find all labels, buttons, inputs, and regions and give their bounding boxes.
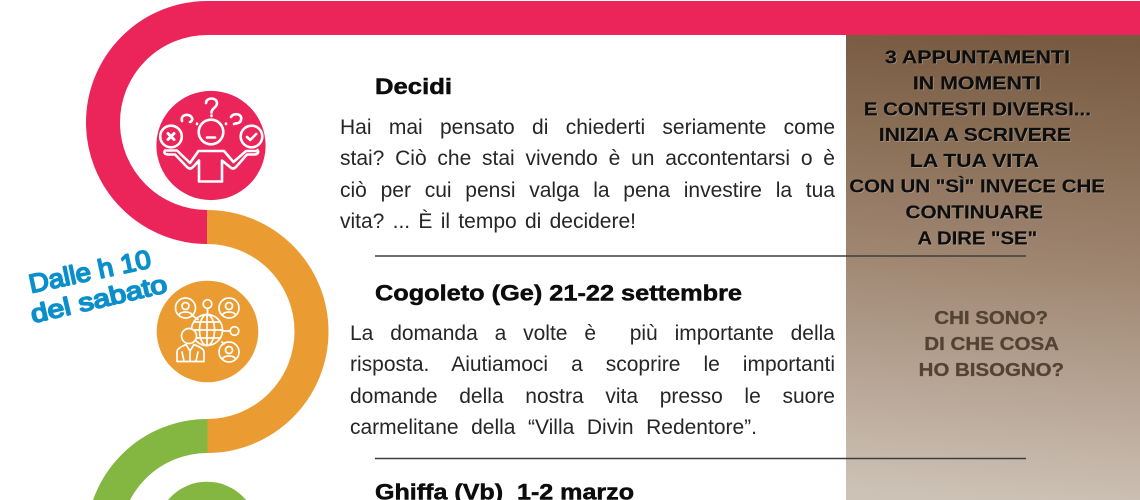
icon: global network on orange circle: [157, 281, 258, 382]
panel questions text: HO BISOGNO?: [919, 360, 1064, 380]
icon: green circle (cropped): [156, 482, 258, 500]
section headings: [375, 74, 742, 500]
text block: Decidi: vita? ... È il tempo di decidere!: [340, 210, 636, 233]
text block: Decidi: [340, 116, 835, 233]
divider lines: [375, 256, 1026, 458]
text block: Cogoleto: carmelitane della “Villa Divin Redentore”.: [350, 416, 757, 439]
panel heading text: E CONTESTI DIVERSI...: [864, 98, 1091, 119]
panel heading text: IN MOMENTI: [913, 72, 1041, 93]
red curve: [103, 18, 208, 227]
side panel: brown gradient: [846, 35, 1140, 500]
label: dalle h 10 del sabato: [26, 244, 170, 329]
label: dalle h 10 del sabato: Dalle h 10: [26, 244, 154, 299]
panel heading text: A DIRE "SE": [918, 227, 1037, 248]
text block: Cogoleto: risposta. Aiutiamoci a scoprire le importanti: [350, 353, 835, 376]
panel heading text: LA TUA VITA: [910, 150, 1039, 171]
orange curve: [207, 227, 312, 436]
text block: Decidi: Hai mai pensato di chiederti seriamente come: [340, 116, 835, 138]
panel questions text: [919, 308, 1064, 380]
heading: Cogoleto: Cogoleto (Ge) 21-22 settembre: [375, 280, 742, 306]
text block: Cogoleto: La domanda a volte è più importante della: [350, 322, 835, 344]
label: dalle h 10 del sabato: del sabato: [28, 270, 170, 329]
panel questions text: CHI SONO?: [934, 308, 1048, 328]
heading: Decidi: Decidi: [375, 74, 452, 99]
text block: Decidi: ciò per cui pensi valga la pena investire la tua: [340, 179, 835, 202]
panel heading text: 3 APPUNTAMENTI: [885, 46, 1070, 67]
red top bar: [207, 1, 1140, 35]
text block: Decidi: stai? Ciò che stai vivendo è un accontentarsi o è: [340, 147, 835, 170]
icon: undecided person on red circle: [156, 91, 266, 200]
green curve: [103, 436, 208, 500]
text block: Cogoleto: domande della nostra vita presso le suore: [350, 385, 835, 408]
panel questions text: DI CHE COSA: [924, 334, 1059, 354]
panel heading text: CON UN "SÌ" INVECE CHE: [850, 176, 1105, 197]
text block: Cogoleto: [350, 322, 835, 439]
panel heading text: CONTINUARE: [906, 202, 1043, 222]
panel heading text: INIZIA A SCRIVERE: [879, 124, 1071, 145]
panel heading text: [850, 46, 1105, 248]
